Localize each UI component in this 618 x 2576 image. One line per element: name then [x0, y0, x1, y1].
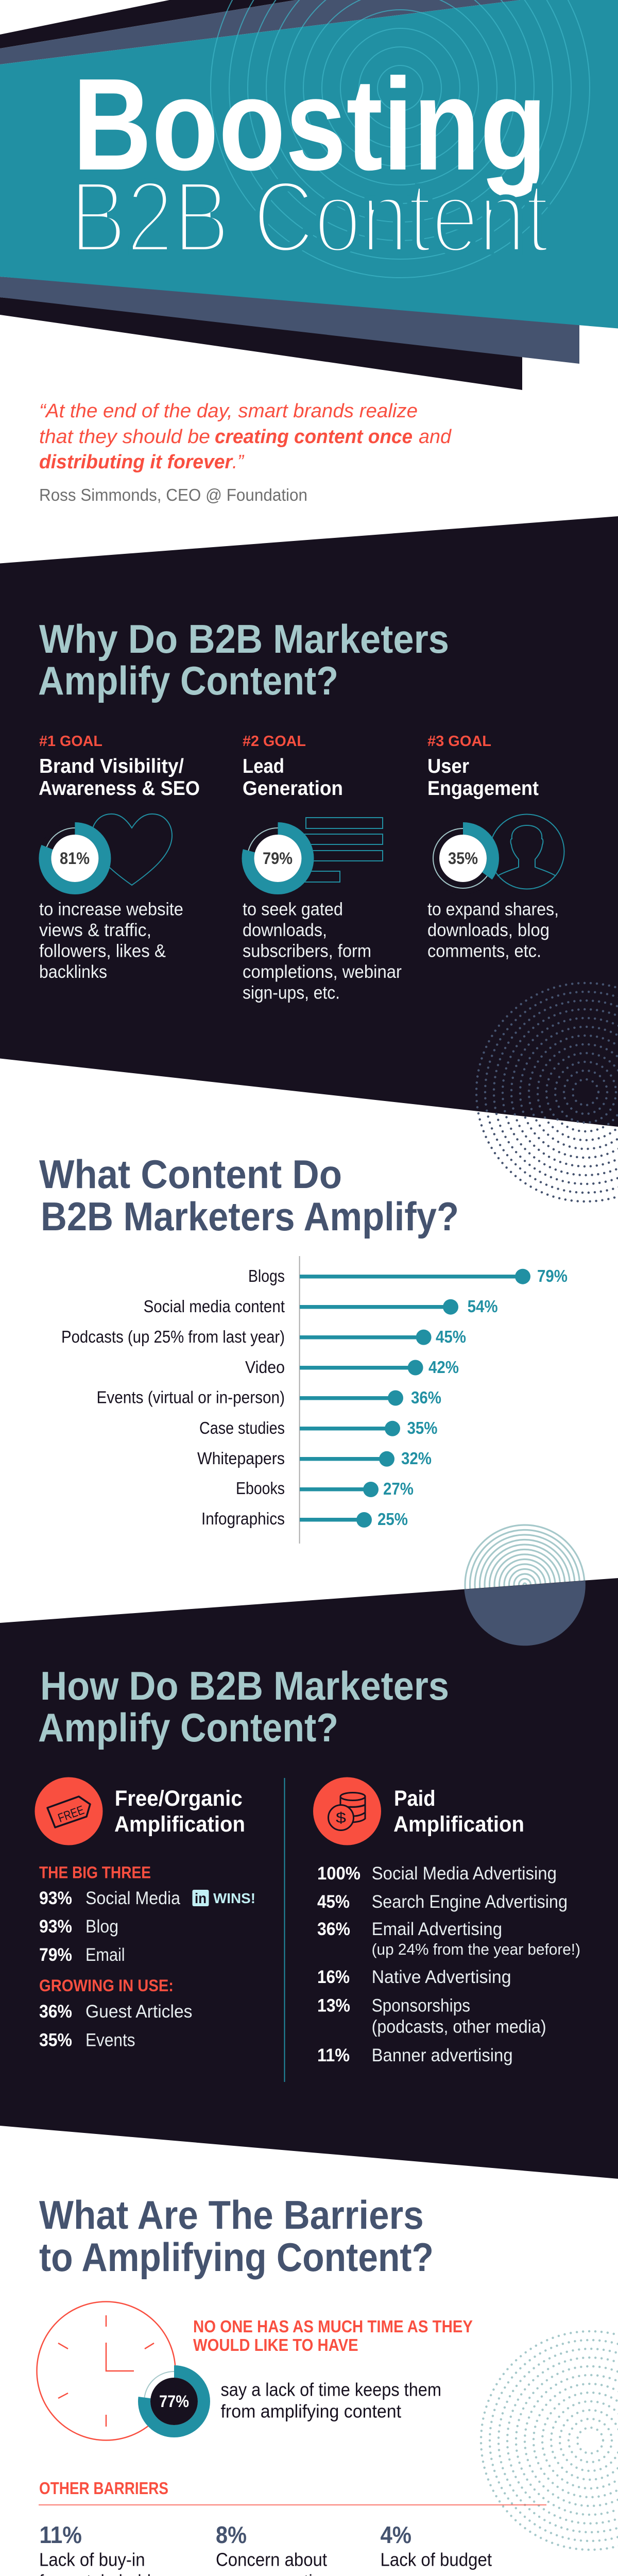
chart: content types lollipop chart: Events (virtual or in-person)	[97, 1388, 285, 1406]
barrier: buy-in	[39, 2521, 175, 2576]
quote attribution: Ross Simmonds, CEO @ Foundation	[39, 485, 307, 504]
chart: content types lollipop chart: Whitepapers	[197, 1449, 285, 1468]
list: free organic stats: WINS!	[213, 1890, 255, 1906]
heading: what are the barriers: to Amplifying Content?	[39, 2234, 434, 2280]
list: free organic stats: Blog	[85, 1917, 118, 1937]
donut: 35%: 35%	[448, 849, 478, 868]
donut: 77%: 77%	[159, 2392, 189, 2411]
panel: how marketers amplify background	[0, 1578, 618, 2179]
list: paid stats: Sponsorships	[372, 1996, 470, 2015]
decorative dotted circle, upper	[476, 983, 618, 1201]
barrier: over-promotion: 8%	[216, 2521, 247, 2548]
list: paid stats: Banner advertising	[372, 2045, 513, 2065]
list: paid stats: (podcasts, other media)	[372, 2016, 546, 2037]
barrier: over-promotion: Concern about	[216, 2549, 327, 2570]
icon: user silhouette	[489, 814, 564, 889]
heading: paid amplification: Amplification	[393, 1812, 524, 1837]
chart: content types lollipop chart: Video	[245, 1358, 285, 1377]
heading: free organic amplification: Amplification	[114, 1812, 245, 1837]
header banner with title	[0, 0, 618, 390]
list: free organic stats: Social Media	[85, 1888, 180, 1908]
heading: what content do b2b marketers amplify: B2B Marketers Amplify?	[41, 1194, 459, 1239]
chart: content types lollipop chart: 42%	[428, 1358, 459, 1377]
goal 3: Engagement	[427, 777, 539, 800]
quote: distributing it forever	[39, 451, 233, 473]
goal 1: views & traffic,	[39, 920, 151, 940]
goal 1: followers, likes &	[39, 941, 166, 961]
donut: 81%	[39, 822, 111, 894]
donut: 79%: 79%	[263, 849, 293, 868]
chart: content types lollipop chart: Blogs	[248, 1266, 285, 1285]
goal 2: to seek gated	[243, 900, 343, 919]
quote: “At the end of the day, smart brands realize	[39, 400, 418, 422]
heading: why do b2b marketers amplify content	[38, 616, 449, 703]
donut: 79%	[242, 822, 314, 894]
list: paid stats	[317, 1863, 580, 2065]
barrier: buy-in: Lack of buy-in	[39, 2549, 145, 2570]
quote: .”	[232, 451, 245, 473]
heading: what content do b2b marketers amplify: What Content Do	[39, 1151, 342, 1197]
chart: content types lollipop chart: 35%	[407, 1418, 438, 1437]
list: free organic stats: Guest Articles	[85, 2002, 193, 2022]
heading: paid amplification: Paid	[394, 1786, 436, 1811]
heading: how do b2b marketers amplify content: How Do B2B Marketers	[40, 1663, 449, 1708]
list: paid stats: Social Media Advertising	[372, 1863, 557, 1884]
list: paid stats: 100%	[317, 1863, 360, 1884]
icon: coins: $	[336, 1810, 346, 1826]
goal 3: downloads, blog	[427, 920, 550, 940]
goal 1: Brand Visibility/	[39, 755, 184, 777]
heading: how do b2b marketers amplify content: Amplify Content?	[38, 1705, 338, 1750]
goal 1: #1 GOAL	[39, 733, 102, 750]
list: free organic stats: Events	[85, 2030, 135, 2050]
icon: free tag: FREE	[56, 1803, 86, 1825]
list: free organic stats: GROWING IN USE:	[39, 1976, 174, 1995]
barrier: budget: Lack of budget	[380, 2549, 492, 2570]
icon: linkedin: in	[195, 1890, 207, 1906]
goal 2: sign-ups, etc.	[243, 983, 340, 1003]
list: free organic stats: 79%	[39, 1945, 72, 1965]
chart: content types lollipop chart: 45%	[436, 1327, 466, 1346]
goal 3: comments, etc.	[427, 941, 541, 961]
callout: lack of time: say a lack of time keeps them	[220, 2379, 441, 2400]
list: paid stats: 16%	[317, 1967, 350, 1987]
goal 2: #2 GOAL	[243, 733, 306, 750]
icon: coins	[313, 1777, 381, 1845]
list: paid stats: 45%	[317, 1892, 350, 1912]
barrier: budget: 4%	[380, 2521, 411, 2548]
goal 2: subscribers, form	[243, 941, 371, 961]
goal 3: to expand shares,	[427, 900, 559, 919]
goal 2: completions, webinar	[243, 962, 402, 982]
barrier: over-promotion	[216, 2521, 332, 2576]
goal 2: downloads,	[243, 920, 327, 940]
callout: lack of time: WOULD LIKE TO HAVE	[193, 2335, 358, 2354]
goal 3: User	[427, 755, 469, 777]
column divider	[284, 1778, 285, 2082]
list: paid stats: (up 24% from the year before!)	[372, 1940, 580, 1958]
list: paid stats: 36%	[317, 1919, 350, 1939]
chart: content types lollipop chart: Social media content	[144, 1297, 285, 1316]
quote	[39, 400, 452, 473]
callout: lack of time	[193, 2317, 473, 2421]
chart: content types lollipop chart: Infographics	[201, 1509, 285, 1528]
goal 1: to increase website	[39, 900, 183, 919]
panel: why marketers amplify background	[0, 516, 618, 1127]
heading: why do b2b marketers amplify content: Amplify Content?	[38, 658, 338, 703]
heading: what are the barriers: What Are The Barriers	[39, 2192, 424, 2238]
heading: what content do b2b marketers amplify	[39, 1151, 459, 1239]
heading: why do b2b marketers amplify content: Why Do B2B Marketers	[39, 616, 449, 662]
chart: content types lollipop chart: 36%	[411, 1388, 441, 1407]
heading: free organic amplification: Free/Organic	[115, 1786, 243, 1811]
chart: content types lollipop chart: 32%	[401, 1449, 432, 1468]
icon: form lines	[294, 818, 383, 882]
goal 2: Lead	[243, 755, 284, 777]
heading: paid amplification	[393, 1786, 524, 1837]
callout: lack of time: from amplifying content	[220, 2401, 401, 2421]
barrier: buy-in: 11%	[39, 2521, 82, 2548]
goal 3: #3 GOAL	[427, 733, 491, 750]
donut: 77%	[138, 2365, 210, 2437]
list: free organic stats: Email	[85, 1945, 125, 1965]
list: paid stats: Native Advertising	[372, 1967, 511, 1987]
callout: lack of time: NO ONE HAS AS MUCH TIME AS THEY	[193, 2317, 473, 2336]
goal 1: Awareness & SEO	[39, 777, 200, 800]
quote: creating content once	[215, 426, 413, 448]
list: free organic stats: 93%	[39, 1888, 72, 1908]
chart: content types lollipop chart: 54%	[468, 1297, 498, 1316]
list: paid stats: Email Advertising	[372, 1919, 502, 1939]
donut: 35%	[427, 822, 499, 894]
goal 1	[39, 733, 200, 982]
quote: that they should be	[39, 426, 210, 448]
list: paid stats: 11%	[317, 2045, 350, 2065]
icon: free tag	[35, 1777, 103, 1845]
quote: and	[419, 426, 452, 448]
list: free organic stats	[39, 1863, 255, 2050]
chart: content types lollipop chart: 27%	[383, 1479, 414, 1498]
goal 2: Generation	[243, 777, 343, 800]
decorative dotted circle, lower	[481, 2331, 618, 2550]
goal 3	[427, 733, 564, 961]
icon: heart	[92, 814, 172, 885]
heading: free organic amplification	[114, 1786, 245, 1837]
decorative concentric rings	[465, 1525, 585, 1645]
goal 2	[242, 733, 402, 1003]
list: paid stats: 13%	[317, 1996, 350, 2015]
heading: what are the barriers	[39, 2192, 434, 2280]
list: free organic stats: THE BIG THREE	[39, 1863, 151, 1882]
other barriers heading and rule: OTHER BARRIERS	[39, 2479, 168, 2498]
chart: content types lollipop chart	[61, 1256, 568, 1544]
decorative slate half disc	[465, 1581, 586, 1646]
goal 1: backlinks	[39, 962, 107, 982]
chart: content types lollipop chart: 25%	[377, 1510, 408, 1529]
donut: 81%: 81%	[60, 849, 90, 868]
chart: content types lollipop chart: Case studies	[199, 1418, 285, 1437]
list: free organic stats: 35%	[39, 2030, 72, 2050]
list: free organic stats: 36%	[39, 2002, 72, 2022]
list: paid stats: Search Engine Advertising	[372, 1892, 568, 1912]
chart: content types lollipop chart: Podcasts (up 25% from last year)	[61, 1327, 285, 1346]
barrier: budget	[380, 2521, 492, 2570]
chart: content types lollipop chart: 79%	[537, 1266, 568, 1285]
chart: content types lollipop chart: Ebooks	[236, 1479, 285, 1498]
list: free organic stats: 93%	[39, 1917, 72, 1937]
icon: clock	[37, 2302, 175, 2440]
heading: how do b2b marketers amplify content	[38, 1663, 449, 1750]
